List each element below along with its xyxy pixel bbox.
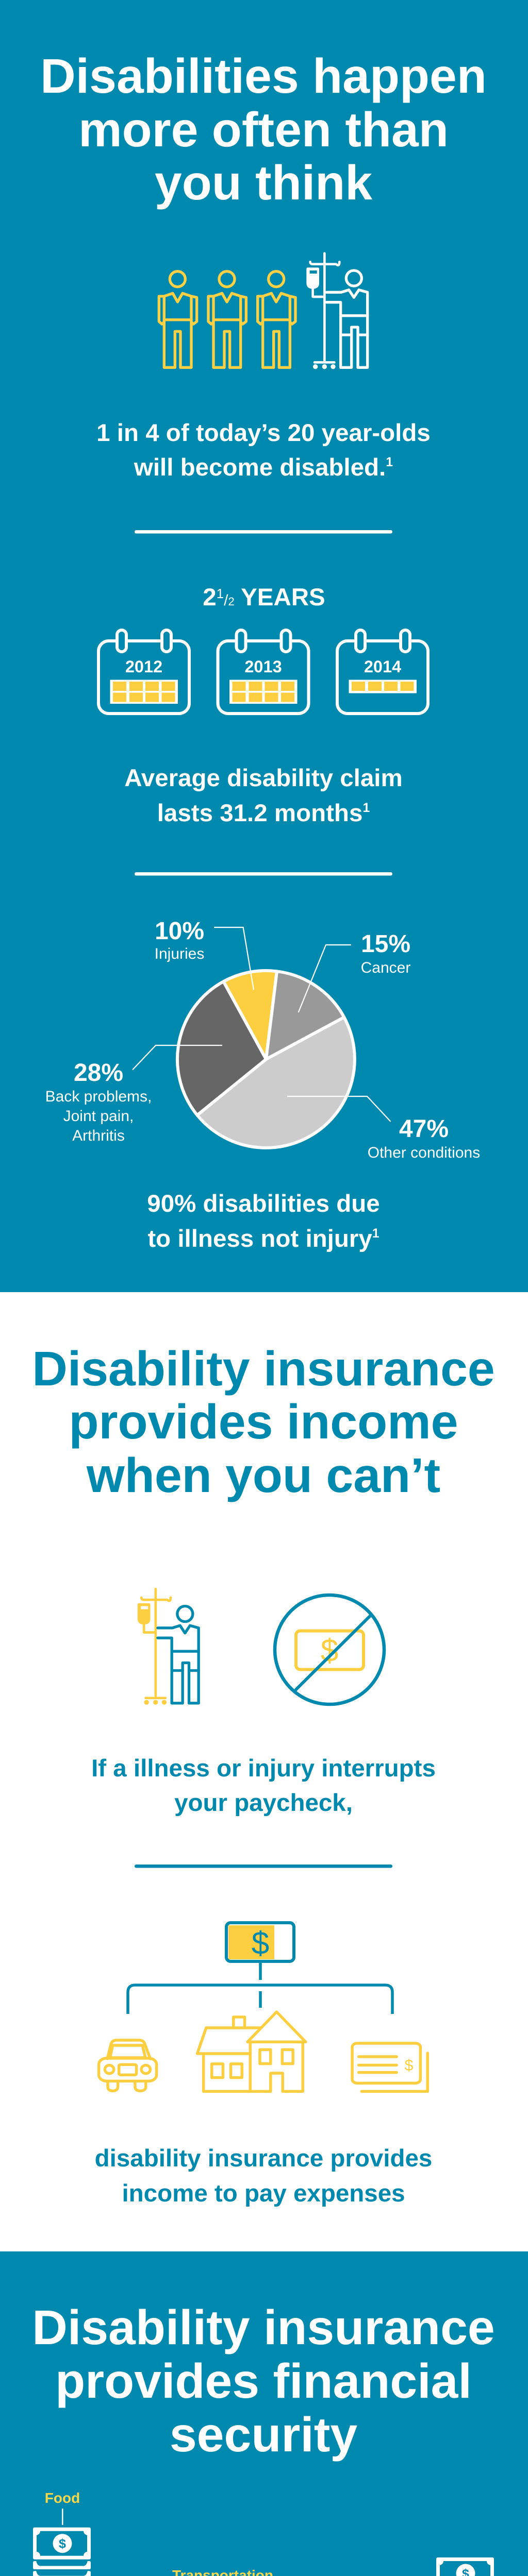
label: 47% other conditions: 47%	[399, 1115, 449, 1143]
label: 10% injuries: 10%	[155, 918, 204, 945]
title: more often than	[78, 103, 449, 157]
heading: two and a half years: 2	[203, 584, 217, 611]
icon: calendar 2013: 2013	[244, 657, 282, 676]
stack: food: Food	[45, 2490, 80, 2506]
text: 1 in 4: will become disabled.	[134, 454, 386, 481]
stack: food	[33, 2490, 91, 2576]
text: average claim: lasts 31.2 months	[157, 800, 362, 827]
text: 1 in 4: 1 in 4 of today’s 20 year-olds	[96, 419, 431, 447]
icon: calendar 2012: 2012	[125, 657, 162, 676]
stack: bills and other expenses	[413, 2557, 516, 2576]
icon: calendar 2014: 2014	[364, 657, 401, 676]
icon: calendar 2014	[337, 630, 428, 714]
slice: other conditions 47%	[197, 1017, 355, 1148]
panel: financial security	[0, 2251, 528, 2576]
icon: three healthy people and one patient with IV stand	[159, 253, 368, 368]
label: 28% back problems: Back problems,	[45, 1088, 152, 1105]
text: average claim: Average disability claim	[124, 765, 403, 792]
icon: income money box	[226, 1923, 294, 1961]
icon: calendar 2012	[98, 630, 189, 714]
label: 15% cancer: Cancer	[361, 959, 410, 976]
label: 15% cancer: 15%	[361, 930, 410, 958]
text: disability insurance provides income: income to pay expenses	[122, 2180, 405, 2207]
slice: cancer 15%	[266, 971, 344, 1059]
slice: injuries 10%	[223, 971, 277, 1059]
text: if an illness: If a illness or injury interrupts	[91, 1755, 436, 1782]
icon: patient with IV stand	[139, 1589, 199, 1703]
title: you think	[155, 156, 372, 210]
panel: disability insurance provides income	[0, 1292, 528, 2251]
heading: provides income	[69, 1395, 458, 1449]
icon: no paycheck: $	[321, 1633, 338, 1669]
icon: income money box: $	[252, 1926, 269, 1961]
icon: bills	[352, 2043, 427, 2091]
heading: two and a half years: /	[224, 592, 228, 609]
text: disability insurance provides income: disability insurance provides	[95, 2145, 432, 2172]
heading: two and a half years: 2 YEARS	[228, 584, 325, 611]
label: 28% back problems: 28%	[74, 1059, 123, 1087]
icon: car	[99, 2040, 157, 2091]
stack: food: $	[59, 2537, 66, 2551]
text: 90% due to illness: 90% disabilities due	[147, 1190, 380, 1217]
text: 1 in 4: 1	[386, 455, 393, 469]
connector: money to expenses	[128, 1963, 392, 2014]
text: average claim: 1	[362, 801, 370, 815]
icon: bills: $	[404, 2056, 414, 2074]
heading: provides financial	[55, 2354, 472, 2409]
heading: security	[170, 2408, 357, 2462]
slice: back problems 28%	[177, 981, 266, 1115]
panel: disabilities happen more often	[0, 0, 528, 1292]
icon: house	[197, 2012, 306, 2091]
label: 10% injuries: Injuries	[155, 945, 204, 962]
label: 28% back problems: Joint pain,	[63, 1108, 134, 1125]
label: 47% other conditions: Other conditions	[368, 1144, 480, 1161]
icon: no paycheck	[275, 1595, 384, 1704]
title: Disabilities happen	[40, 49, 487, 104]
label: 28% back problems: Arthritis	[72, 1127, 125, 1144]
text: 90% due to illness: to illness not injury	[147, 1225, 372, 1252]
heading: when you can’t	[86, 1448, 440, 1503]
heading: Disability insurance	[32, 2300, 495, 2355]
text: 90% due to illness: 1	[372, 1226, 380, 1241]
pie chart: causes of disability	[45, 918, 480, 1161]
heading: two and a half years: 1	[217, 586, 224, 601]
text: if an illness: your paycheck,	[174, 1789, 353, 1817]
heading: Disability insurance	[32, 1342, 495, 1396]
icon: calendar 2013	[218, 630, 308, 714]
